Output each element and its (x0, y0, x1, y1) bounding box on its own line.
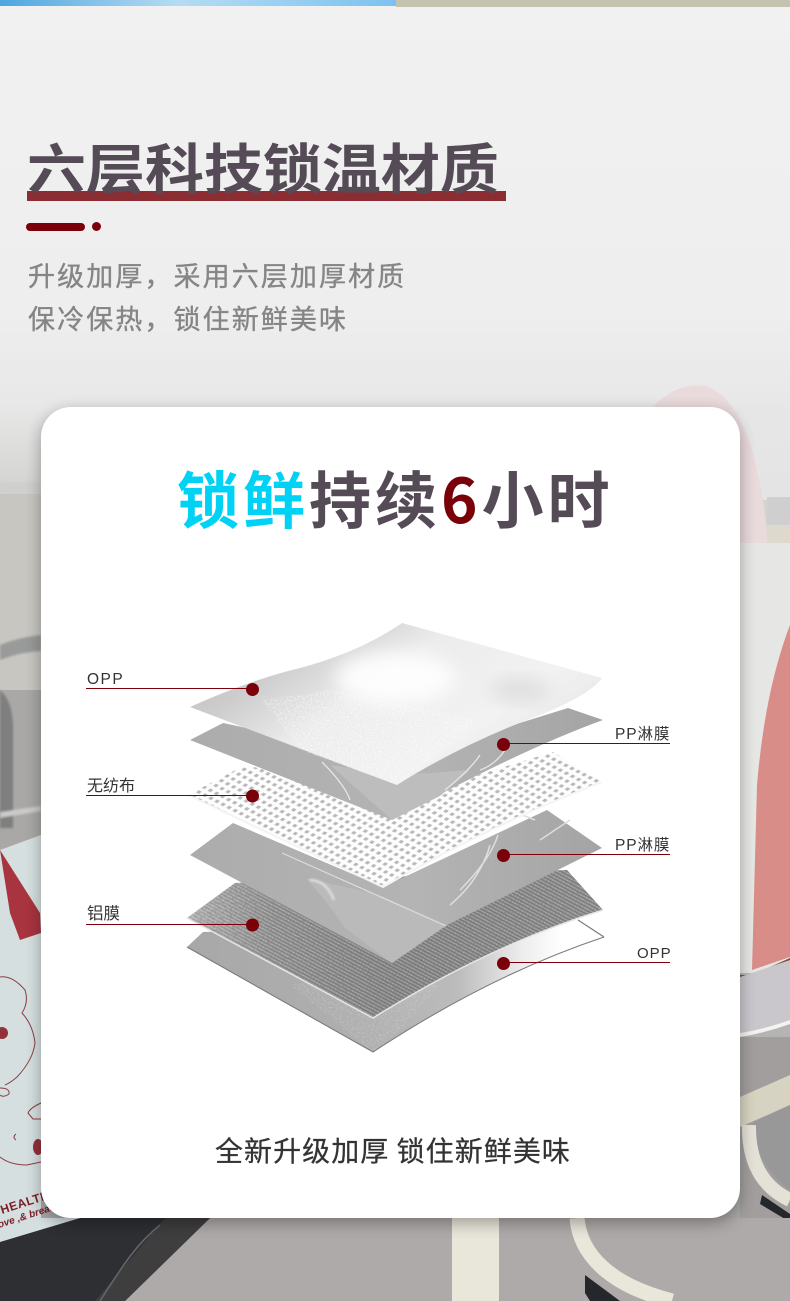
right paper bag (740, 543, 790, 978)
card heading: 锁鲜持续6小时 (177, 451, 614, 541)
table post (452, 1218, 499, 1301)
six-layer material diagram (86, 623, 672, 1052)
title accent (26, 222, 101, 231)
layer: PP film upper (190, 708, 603, 820)
callout: aluminium film (86, 904, 259, 932)
layer: top OPP foil (190, 623, 602, 785)
chair foot and leg (585, 1275, 620, 1301)
subtitle text: 保冷保热，锁住新鲜美味 (28, 298, 348, 337)
card caption: 全新升级加厚 锁住新鲜美味 (215, 1130, 571, 1170)
title underline bar (27, 191, 506, 201)
callout: PP film upper: PP淋膜 (615, 725, 670, 743)
callout: OPP bottom: OPP (637, 945, 672, 962)
layer: PP film lower (190, 810, 602, 963)
layer: bottom OPP foil (187, 920, 604, 1052)
white card (41, 407, 740, 1223)
callout: aluminium film: 铝膜 (87, 904, 120, 923)
layer: aluminium film weave (187, 870, 603, 1018)
layer: non-woven dotted (188, 752, 602, 887)
left bear bag: HEALTH (0, 1188, 51, 1217)
callout: non-woven (86, 777, 259, 802)
pink chair back (650, 386, 768, 543)
subtitle text: 升级加厚，采用六层加厚材质 (28, 255, 406, 294)
callout: OPP bottom (497, 945, 672, 970)
table top (740, 960, 790, 1033)
section title: 六层科技锁温材质 (27, 127, 499, 205)
chair tube (740, 1075, 790, 1127)
callout: non-woven: 无纺布 (87, 777, 135, 795)
subtitle text (28, 255, 406, 337)
floor (0, 1218, 790, 1301)
callout: PP film upper (497, 725, 670, 751)
callout: PP film lower (497, 836, 670, 862)
callout: OPP top (86, 671, 259, 696)
callout: PP film lower: PP淋膜 (615, 836, 670, 854)
left bear bag (0, 835, 80, 1242)
callout: OPP top: OPP (87, 671, 124, 688)
right room backdrop (740, 380, 790, 500)
left room backdrop (0, 482, 41, 850)
